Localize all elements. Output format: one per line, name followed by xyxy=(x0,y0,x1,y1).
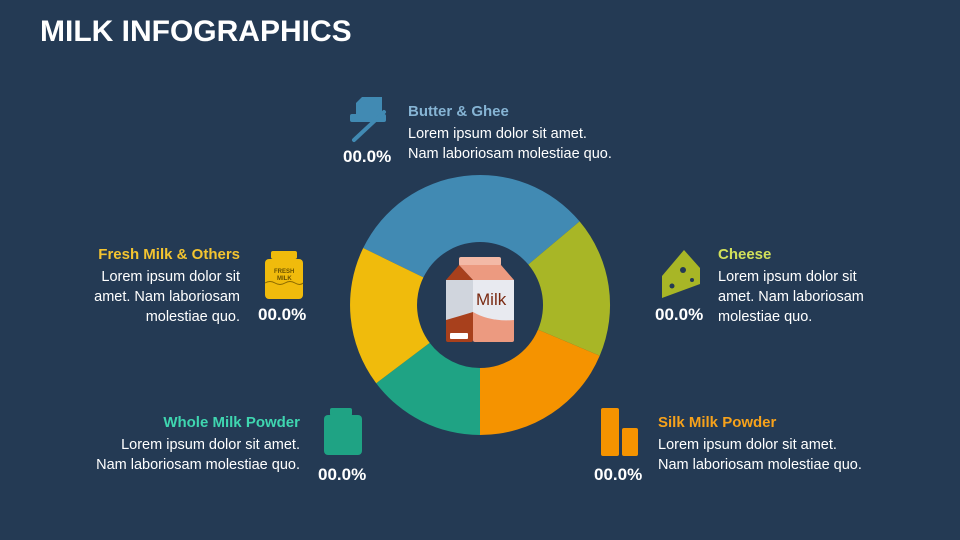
icon: fresh milk jar: FRESH xyxy=(274,269,294,275)
icon: milk carton: Milk xyxy=(476,290,507,309)
icon: butter xyxy=(350,97,386,140)
text: silk milk powder: Lorem ipsum dolor sit amet. xyxy=(658,437,837,453)
text: cheese: Lorem ipsum dolor sit xyxy=(718,269,857,285)
icon: milk carton xyxy=(446,257,514,342)
text: cheese: molestiae quo. xyxy=(718,309,812,325)
text: fresh milk: molestiae quo. xyxy=(146,309,240,325)
text: silk milk powder xyxy=(658,414,862,473)
title: MILK INFOGRAPHICS xyxy=(40,15,352,48)
text: fresh milk: Lorem ipsum dolor sit xyxy=(101,269,240,285)
text: butter & ghee xyxy=(408,103,612,162)
text: 00.0% xyxy=(318,465,366,484)
text: 00.0% xyxy=(594,465,642,484)
text: whole milk powder: Lorem ipsum dolor sit amet. xyxy=(121,437,300,453)
text: whole milk powder xyxy=(96,414,300,473)
text: butter & ghee: Lorem ipsum dolor sit amet. xyxy=(408,126,587,142)
icon: cheese xyxy=(662,250,700,298)
text: butter & ghee: Nam laboriosam molestiae quo. xyxy=(408,146,612,162)
text: 00.0% xyxy=(258,305,306,324)
text: cheese: amet. Nam laboriosam xyxy=(718,289,864,305)
text: 00.0% xyxy=(343,147,391,166)
text: butter & ghee: Butter & Ghee xyxy=(408,103,509,120)
text: fresh milk: Fresh Milk & Others xyxy=(98,246,240,263)
text: whole milk powder: Nam laboriosam molestiae quo. xyxy=(96,457,300,473)
text: silk milk powder: Silk Milk Powder xyxy=(658,414,776,431)
text: cheese: Cheese xyxy=(718,246,771,263)
icon: whole milk powder xyxy=(324,408,362,455)
icon: fresh milk jar xyxy=(265,251,303,299)
text: fresh milk xyxy=(94,246,240,325)
text: 00.0% xyxy=(655,305,703,324)
text: silk milk powder: Nam laboriosam molestiae quo. xyxy=(658,457,862,473)
icon: silk milk powder xyxy=(601,408,638,456)
text: whole milk powder: Whole Milk Powder xyxy=(163,414,300,431)
text: fresh milk: amet. Nam laboriosam xyxy=(94,289,240,305)
icon: fresh milk jar: MILK xyxy=(277,276,292,282)
text: cheese xyxy=(718,246,864,325)
